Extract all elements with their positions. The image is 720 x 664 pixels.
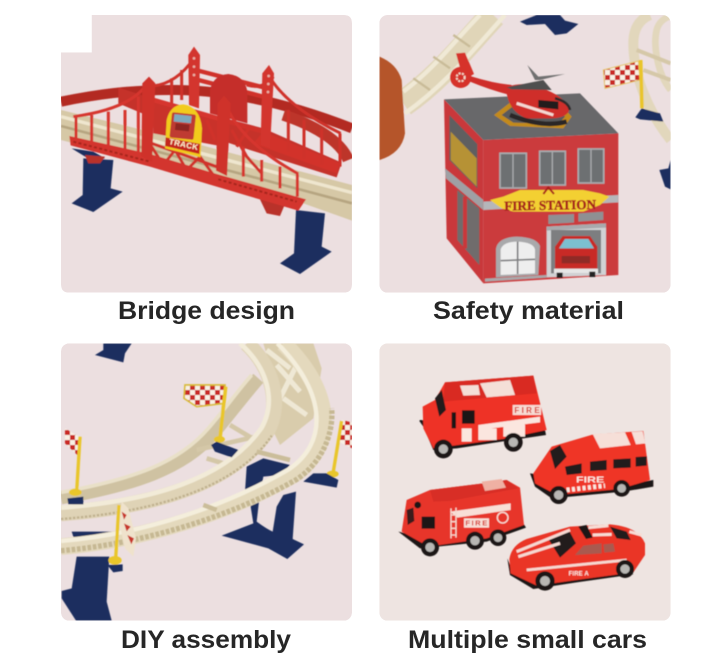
front cables and posts bbox=[73, 82, 298, 197]
roof bbox=[444, 93, 618, 140]
illustration: spiral track and flags bbox=[61, 343, 352, 621]
right blue pier bbox=[222, 478, 304, 559]
garage door and fire truck bbox=[547, 212, 606, 278]
van right: FIRE bbox=[576, 474, 605, 484]
helipad bbox=[494, 100, 572, 128]
caption: multiple small cars: Multiple small cars bbox=[408, 626, 647, 654]
sports car bbox=[507, 524, 645, 591]
flag right bbox=[303, 420, 352, 488]
fire truck top left bbox=[419, 376, 547, 458]
illustration: fire station with helicopter bbox=[379, 15, 671, 283]
bridge sign: TRACK bbox=[168, 137, 199, 152]
caption: DIY assembly: DIY assembly bbox=[121, 626, 291, 654]
panel: bridge design bbox=[61, 15, 352, 293]
back red rail bbox=[61, 90, 352, 128]
beige track bbox=[61, 110, 352, 221]
sports car: FIRE A bbox=[569, 572, 589, 578]
panel: DIY assembly bbox=[61, 343, 352, 621]
fire truck top left: FIRE bbox=[514, 406, 540, 415]
building left face bbox=[444, 99, 483, 283]
bridge sign bbox=[165, 104, 202, 157]
windows bbox=[500, 149, 604, 188]
fire station sign bbox=[490, 187, 609, 213]
panel background bbox=[379, 15, 671, 293]
outer track with pebble edge bbox=[61, 343, 323, 547]
right pier bbox=[280, 210, 332, 274]
upper thin track bbox=[61, 378, 258, 498]
illustration: red bridge on beige track bbox=[61, 47, 352, 274]
left blue pier bbox=[62, 532, 113, 621]
caption: bridge design: Bridge design bbox=[118, 297, 295, 325]
flag top center bbox=[184, 385, 238, 457]
fire engine left bbox=[398, 479, 526, 556]
flag front bbox=[107, 502, 136, 572]
left pier bbox=[72, 148, 123, 212]
panel background bbox=[379, 343, 671, 621]
arched window bbox=[485, 237, 547, 282]
blue pier lower right bbox=[659, 160, 671, 189]
pier caps bbox=[85, 155, 285, 216]
beige track right bbox=[633, 15, 671, 140]
building front face bbox=[483, 133, 618, 283]
fire station sign: FIRE STATION bbox=[504, 197, 596, 213]
circular ornament bbox=[210, 74, 247, 123]
van right bbox=[530, 431, 653, 504]
caption: safety material: Safety material bbox=[433, 297, 624, 325]
checkered flag bbox=[603, 60, 663, 122]
panel background bbox=[61, 15, 352, 293]
blue pier top bbox=[95, 343, 132, 362]
front deck bbox=[69, 136, 306, 211]
back towers bbox=[188, 47, 200, 108]
fire engine left: FIRE bbox=[465, 519, 487, 528]
front towers bbox=[141, 77, 155, 162]
panel: multiple small cars bbox=[379, 343, 671, 621]
panel: safety material bbox=[379, 15, 671, 293]
beige track left bbox=[403, 15, 493, 103]
center deck fill bbox=[152, 117, 218, 146]
brown support bbox=[379, 57, 405, 160]
panel background bbox=[61, 343, 352, 621]
central truss bbox=[152, 130, 261, 174]
back blue pier bbox=[245, 458, 290, 495]
back bridge deck and truss bbox=[118, 87, 342, 177]
blue pier top bbox=[520, 15, 578, 35]
middle track bbox=[61, 343, 274, 513]
back spans cables and posts bbox=[153, 58, 341, 167]
helicopter bbox=[450, 53, 570, 124]
illustration: four red toy cars bbox=[398, 376, 653, 591]
flag left bbox=[65, 428, 83, 504]
far lattice bbox=[263, 343, 322, 445]
